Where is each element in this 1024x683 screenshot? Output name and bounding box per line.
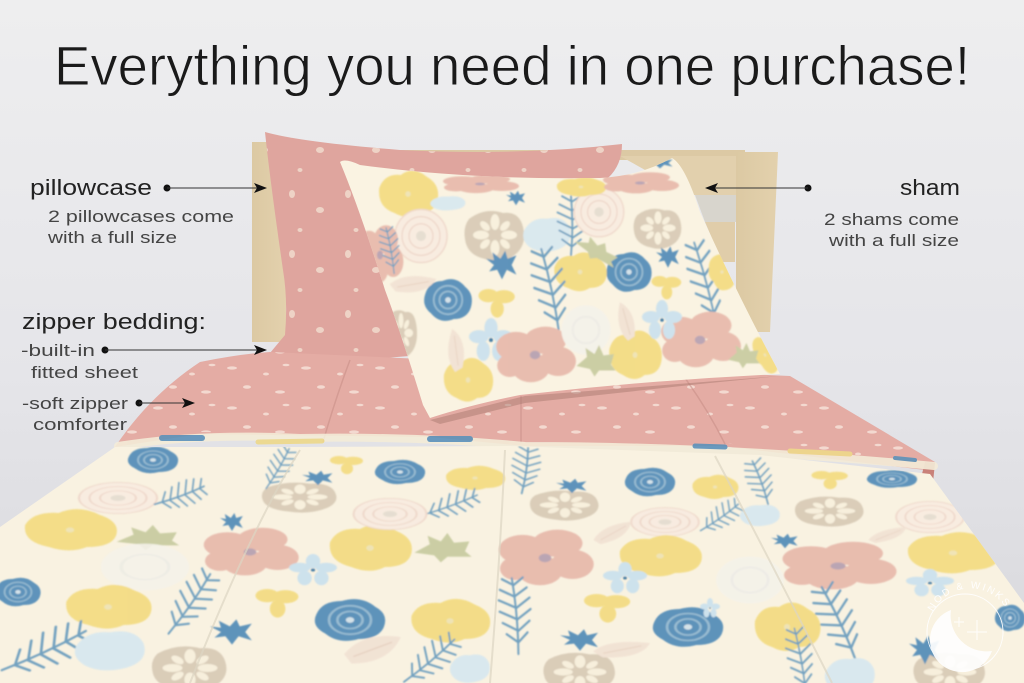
comforter zipper binding: [118, 437, 934, 466]
callout: zipper bedding: zipper bedding:: [22, 309, 206, 334]
callout: pillowcase: pillowcase: [30, 175, 152, 200]
callout: zipper bedding: comforter: [33, 415, 127, 434]
callout: zipper bedding: [21, 309, 206, 434]
callout: zipper bedding: fitted sheet: [31, 363, 138, 382]
title: Everything you need in one purchase!: [54, 34, 970, 97]
callout: pillowcase: [30, 175, 234, 247]
callout: sham: sham: [900, 175, 960, 200]
pillow shadow on sheet: [430, 376, 780, 424]
callout: zipper bedding: -built-in: [21, 341, 95, 360]
floral front pillow: [340, 158, 780, 418]
arrow: built-in fitted sheet: [102, 345, 267, 355]
logo: Nod & Winks moon: [926, 581, 1010, 672]
pink back pillow: [265, 132, 660, 358]
callout: sham: with a full size: [828, 231, 959, 250]
wooden headboard: [252, 142, 778, 342]
callout: pillowcase: with a full size: [47, 228, 177, 247]
callout: sham: [824, 175, 960, 250]
comforter quilting seams: [190, 450, 832, 683]
callout: zipper bedding: -soft zipper: [22, 394, 128, 413]
floral comforter: [0, 440, 1024, 683]
comforter flower print: [0, 443, 1024, 683]
arrow: soft zipper comforter: [136, 398, 195, 408]
pillow flower print: [358, 158, 784, 402]
arrow: pillowcase: [164, 183, 267, 193]
arrow: sham: [705, 183, 812, 193]
logo: Nod & Winks moon: NOD & WINKS: [928, 581, 1010, 611]
callout: sham: 2 shams come: [824, 210, 959, 229]
callout: pillowcase: 2 pillowcases come: [48, 207, 234, 226]
pink fitted sheet top: [115, 352, 935, 492]
back pillow dot pattern: [265, 132, 622, 355]
